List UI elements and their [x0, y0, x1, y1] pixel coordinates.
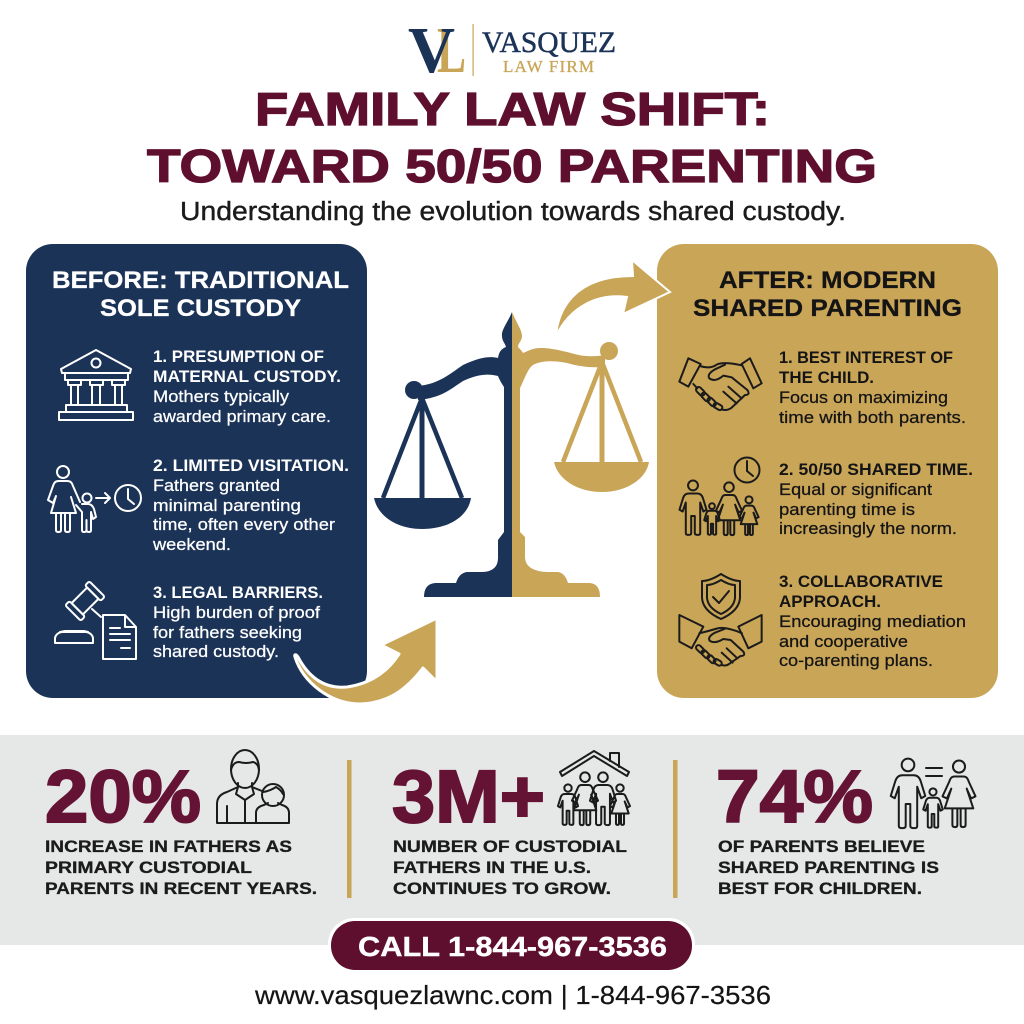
text: item 2 [779, 460, 973, 538]
arrow: top, toward after panel [556, 260, 670, 336]
icon: courthouse [59, 350, 133, 420]
logo: Vasquez Law Firm: LAW FIRM [503, 57, 594, 76]
text: item 2: Equal or significant [779, 480, 932, 499]
panel heading: before: BEFORE: TRADITIONAL [52, 267, 349, 294]
stat: 74%: 74% [716, 755, 873, 838]
text: item 3: 3. LEGAL BARRIERS. [153, 583, 323, 602]
text: item 3: for fathers seeking [153, 623, 302, 642]
subtitle: Understanding the evolution towards shared custody. [180, 198, 846, 226]
icon: handshake [679, 358, 762, 411]
text: item 1: time with both parents. [779, 408, 966, 427]
text: 20% caption: INCREASE IN FATHERS AS [45, 837, 292, 856]
text: item 1: MATERNAL CUSTODY. [153, 367, 341, 386]
stat: 20%: 20% [45, 755, 201, 838]
text: item 2: time, often every other [153, 515, 335, 534]
text: item 2: increasingly the norm. [779, 519, 957, 538]
text: 3M+ caption: CONTINUES TO GROW. [393, 879, 611, 898]
text: item 2: minimal parenting [153, 496, 301, 515]
stat: 3M+: 3M+ [392, 755, 545, 838]
icon: father and son [217, 750, 289, 823]
text: item 3: High burden of proof [153, 603, 320, 622]
logo: Vasquez Law Firm: V [408, 14, 455, 87]
text: 20% caption [45, 837, 317, 898]
text: item 3: and cooperative [779, 632, 908, 651]
icon: family under roof [558, 751, 630, 825]
text: 20% caption: PARENTS IN RECENT YEARS. [45, 879, 317, 898]
text: item 2: 2. 50/50 SHARED TIME. [779, 460, 973, 479]
text: item 2: parenting time is [779, 500, 915, 519]
icon: shield and handshake [679, 574, 762, 666]
text: 74% caption: BEST FOR CHILDREN. [718, 879, 922, 898]
text: item 2 [152, 456, 349, 554]
logo: Vasquez Law Firm: VASQUEZ [482, 26, 616, 59]
arrow: bottom, from before panel [295, 618, 437, 704]
panel heading: before: SOLE CUSTODY [100, 295, 301, 322]
text: item 3: Encouraging mediation [779, 612, 966, 631]
text: item 1: awarded primary care. [153, 407, 331, 426]
icon: mother and child to clock [48, 466, 141, 532]
stat: 20% [45, 750, 317, 898]
stat: 3M+ [392, 751, 630, 898]
text: item 3: shared custody. [153, 642, 279, 661]
text: item 3: 3. COLLABORATIVE [779, 572, 943, 591]
text: item 1: 1. PRESUMPTION OF [153, 347, 324, 366]
text: item 3 [153, 583, 323, 661]
text: item 2: Fathers granted [153, 476, 280, 495]
text: 74% caption [718, 837, 939, 898]
panel heading: before [52, 267, 349, 322]
icon: family with clock [680, 458, 760, 535]
stat: 74% [716, 755, 976, 898]
icon: parents and child with equals sign [891, 759, 976, 828]
footer contact line: www.vasquezlawnc.com | 1-844-967-3536 [254, 980, 771, 1010]
panel heading: after: AFTER: MODERN [719, 267, 936, 294]
text: item 3 [779, 572, 966, 670]
icon: gavel and document [55, 581, 136, 659]
text: 74% caption: SHARED PARENTING IS [718, 858, 939, 877]
text: 74% caption: OF PARENTS BELIEVE [718, 837, 925, 856]
panel: before, traditional sole custody [26, 244, 367, 698]
text: item 1 [779, 348, 966, 427]
call button: CALL 1-844-967-3536 [358, 931, 667, 962]
stats band [0, 735, 1024, 945]
text: item 2: weekend. [152, 535, 231, 554]
title: TOWARD 50/50 PARENTING [147, 140, 877, 192]
scales of justice [374, 312, 649, 597]
text: item 1: Focus on maximizing [779, 388, 948, 407]
logo: Vasquez Law Firm: L [437, 14, 466, 87]
text: 20% caption: PRIMARY CUSTODIAL [45, 858, 252, 877]
title: FAMILY LAW SHIFT: [255, 83, 770, 135]
panel heading: after: SHARED PARENTING [693, 295, 962, 322]
text: item 1: THE CHILD. [779, 368, 874, 387]
text: 3M+ caption: NUMBER OF CUSTODIAL [393, 837, 627, 856]
panel heading: after [693, 267, 962, 322]
panel: after, modern shared parenting [657, 244, 998, 698]
logo: Vasquez Law Firm [408, 14, 616, 87]
title [147, 83, 877, 192]
text: item 3: co-parenting plans. [779, 651, 933, 670]
text: item 1: Mothers typically [153, 387, 290, 406]
text: item 2: 2. LIMITED VISITATION. [153, 456, 349, 475]
text: item 3: APPROACH. [779, 592, 881, 611]
text: item 1 [153, 347, 341, 426]
text: item 1: 1. BEST INTEREST OF [779, 348, 953, 367]
text: 3M+ caption: FATHERS IN THE U.S. [393, 858, 591, 877]
text: 3M+ caption [393, 837, 627, 898]
call button [328, 918, 695, 972]
